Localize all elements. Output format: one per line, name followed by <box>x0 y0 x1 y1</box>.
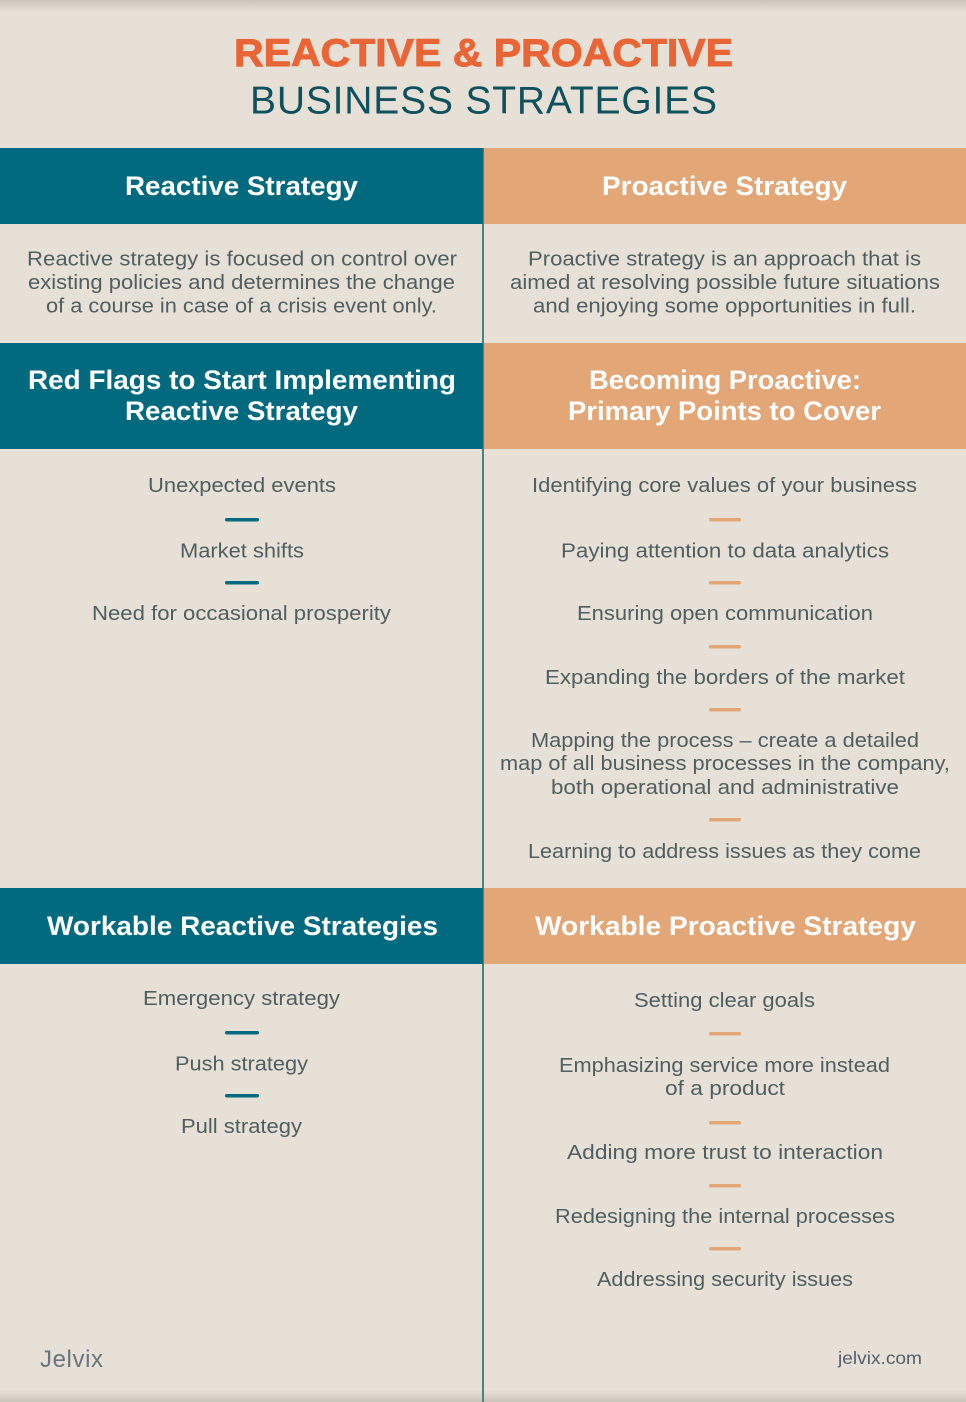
list: becoming proactive points: Expanding the borders of the market <box>545 667 905 689</box>
text block: reactive strategy description <box>27 248 457 318</box>
list: workable proactive strategy: Addressing security issues <box>597 1269 853 1291</box>
list: red flags <box>92 475 391 625</box>
list: workable reactive strategies <box>143 988 340 1138</box>
list: workable proactive strategy: Adding more trust to interaction <box>567 1142 883 1164</box>
logo: Jelvix: Jelvix <box>40 1346 103 1373</box>
panel: proactive strategy header: Proactive Strategy <box>602 171 847 201</box>
list: becoming proactive points: map of all business processes in the company, <box>500 753 950 775</box>
text block: reactive strategy description: of a course in case of a crisis event only. <box>46 296 437 318</box>
text block: proactive strategy description: aimed at resolving possible future situations <box>510 272 940 294</box>
text block: reactive strategy description: Reactive strategy is focused on control over <box>27 248 457 270</box>
list: workable proactive strategy <box>555 990 895 1291</box>
list: red flags: Market shifts <box>180 540 304 562</box>
list: red flags: Need for occasional prosperity <box>92 603 391 625</box>
panel: workable proactive strategy header <box>484 888 966 964</box>
list: becoming proactive points <box>500 475 950 863</box>
panel: red flags header: Red Flags to Start Implementing <box>28 365 456 395</box>
panel: red flags header: Reactive Strategy <box>125 396 358 426</box>
panel: red flags header <box>0 343 483 449</box>
panel: workable reactive strategies header <box>0 888 483 964</box>
panel: workable reactive strategies header: Workable Reactive Strategies <box>47 911 438 941</box>
list: red flags: Unexpected events <box>148 475 336 497</box>
panel: reactive strategy header: Reactive Strategy <box>125 171 358 201</box>
panel: becoming proactive header: Becoming Proactive: <box>589 365 861 395</box>
list: workable proactive strategy: Redesigning the internal processes <box>555 1206 895 1228</box>
title <box>234 32 733 122</box>
list: workable reactive strategies: Emergency strategy <box>143 988 340 1010</box>
text block: proactive strategy description <box>510 248 940 318</box>
text block: reactive strategy description: existing policies and determines the change <box>28 272 455 294</box>
title: REACTIVE & PROACTIVE <box>234 32 733 75</box>
panel: reactive strategy header <box>0 148 483 224</box>
text block: proactive strategy description: and enjoying some opportunities in full. <box>533 296 916 318</box>
list: workable reactive strategies: Pull strategy <box>181 1116 302 1138</box>
list: becoming proactive points: both operational and administrative <box>551 777 899 799</box>
list: workable proactive strategy: Emphasizing service more instead <box>559 1055 890 1077</box>
list: becoming proactive points: Learning to address issues as they come <box>528 841 921 863</box>
list: becoming proactive points: Identifying core values of your business <box>532 475 917 497</box>
list: workable proactive strategy: of a product <box>665 1078 786 1100</box>
title: BUSINESS STRATEGIES <box>250 80 717 122</box>
list: becoming proactive points: Mapping the process – create a detailed <box>531 730 919 752</box>
panel: becoming proactive header <box>484 343 966 449</box>
panel: proactive strategy header <box>484 148 966 224</box>
panel: workable proactive strategy header: Workable Proactive Strategy <box>535 911 916 941</box>
list: workable reactive strategies: Push strategy <box>175 1054 308 1076</box>
list: workable proactive strategy: Setting clear goals <box>634 990 815 1012</box>
panel: becoming proactive header: Primary Points to Cover <box>568 396 881 426</box>
list: becoming proactive points: Ensuring open communication <box>577 603 873 625</box>
list: becoming proactive points: Paying attention to data analytics <box>561 540 889 562</box>
footer url: jelvix.com <box>837 1348 922 1368</box>
text block: proactive strategy description: Proactive strategy is an approach that is <box>528 248 921 270</box>
